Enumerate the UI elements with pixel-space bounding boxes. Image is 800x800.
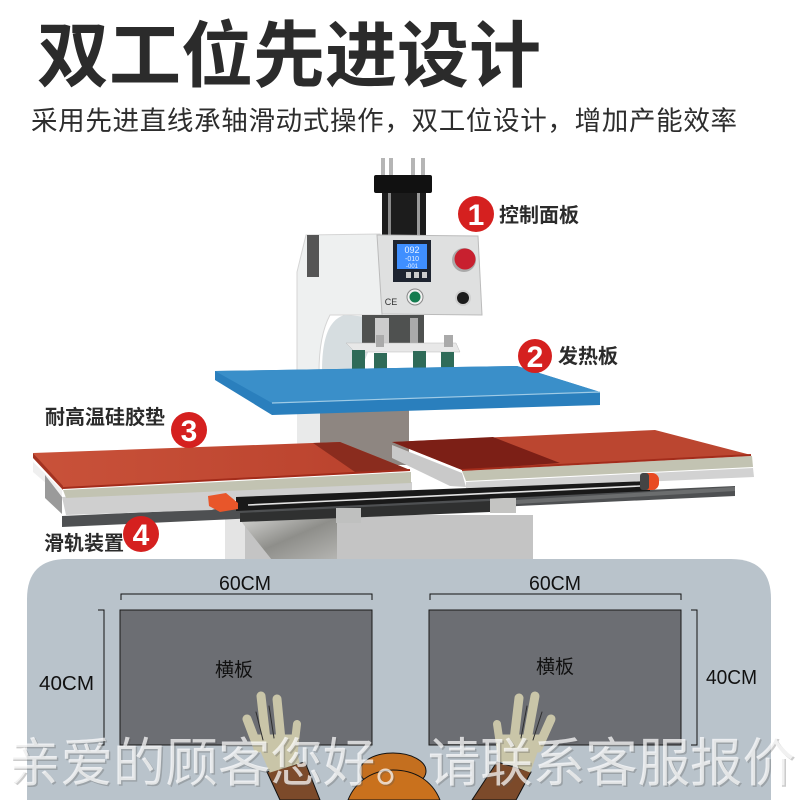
left board: 横板 (215, 659, 253, 681)
control box (377, 235, 482, 315)
watermark: 亲爱的顾客您好。请联系客服报价 (8, 734, 795, 793)
right width dimension: 60CM (529, 573, 581, 595)
body (348, 770, 440, 800)
left height dimension (39, 610, 104, 745)
right board (429, 610, 681, 745)
heating plate (215, 366, 600, 415)
panel: size diagram (27, 559, 771, 800)
digital display: -010 (405, 256, 419, 263)
title: 双工位先进设计 (37, 17, 541, 97)
left width dimension (121, 573, 372, 600)
emergency stop (452, 248, 476, 272)
base cabinet (225, 515, 533, 560)
callout 2: 发热板 (558, 345, 618, 368)
right height dimension (691, 610, 757, 745)
callout 3: 耐高温硅胶垫 (45, 405, 165, 429)
left board (120, 610, 372, 745)
CE mark: CE (385, 297, 397, 307)
digital display (393, 240, 431, 282)
right height dimension: 40CM (706, 667, 757, 689)
press mechanism (346, 315, 460, 380)
green button (407, 289, 423, 305)
right board: 横板 (536, 656, 574, 678)
left height dimension: 40CM (39, 673, 94, 695)
watermark: 亲爱的顾客您好。请联系客服报价 (10, 736, 796, 794)
callout 1: 1 (468, 199, 484, 232)
right glove (497, 696, 551, 772)
head (360, 753, 426, 789)
callout 1: 控制面板 (499, 204, 579, 227)
subtitle: 采用先进直线承轴滑动式操作，双工位设计，增加产能效率 (31, 106, 737, 136)
handle bar (208, 473, 659, 512)
operator figure (247, 696, 551, 800)
callout 2: 2 (527, 341, 543, 374)
callout 4: 4 (133, 519, 150, 552)
right width dimension (430, 573, 681, 600)
heat press machine (33, 158, 754, 560)
digital display: -001 (406, 264, 419, 270)
left platen (33, 442, 412, 515)
callout 3: 3 (181, 415, 197, 448)
cylinder (374, 158, 432, 236)
callout 1 (458, 196, 579, 232)
callout 4: 滑轨装置 (44, 532, 124, 555)
left glove (247, 696, 299, 772)
machine column (297, 405, 409, 465)
callout 2 (518, 339, 618, 374)
rotary switch (455, 290, 471, 306)
right arm (472, 762, 531, 800)
callout 4 (44, 516, 159, 555)
callout 3 (45, 405, 207, 448)
right platen (392, 430, 754, 488)
digital display: 092 (404, 245, 420, 255)
machine body (297, 234, 382, 372)
left arm (267, 762, 320, 800)
rail (62, 486, 735, 527)
left width dimension: 60CM (219, 573, 271, 595)
